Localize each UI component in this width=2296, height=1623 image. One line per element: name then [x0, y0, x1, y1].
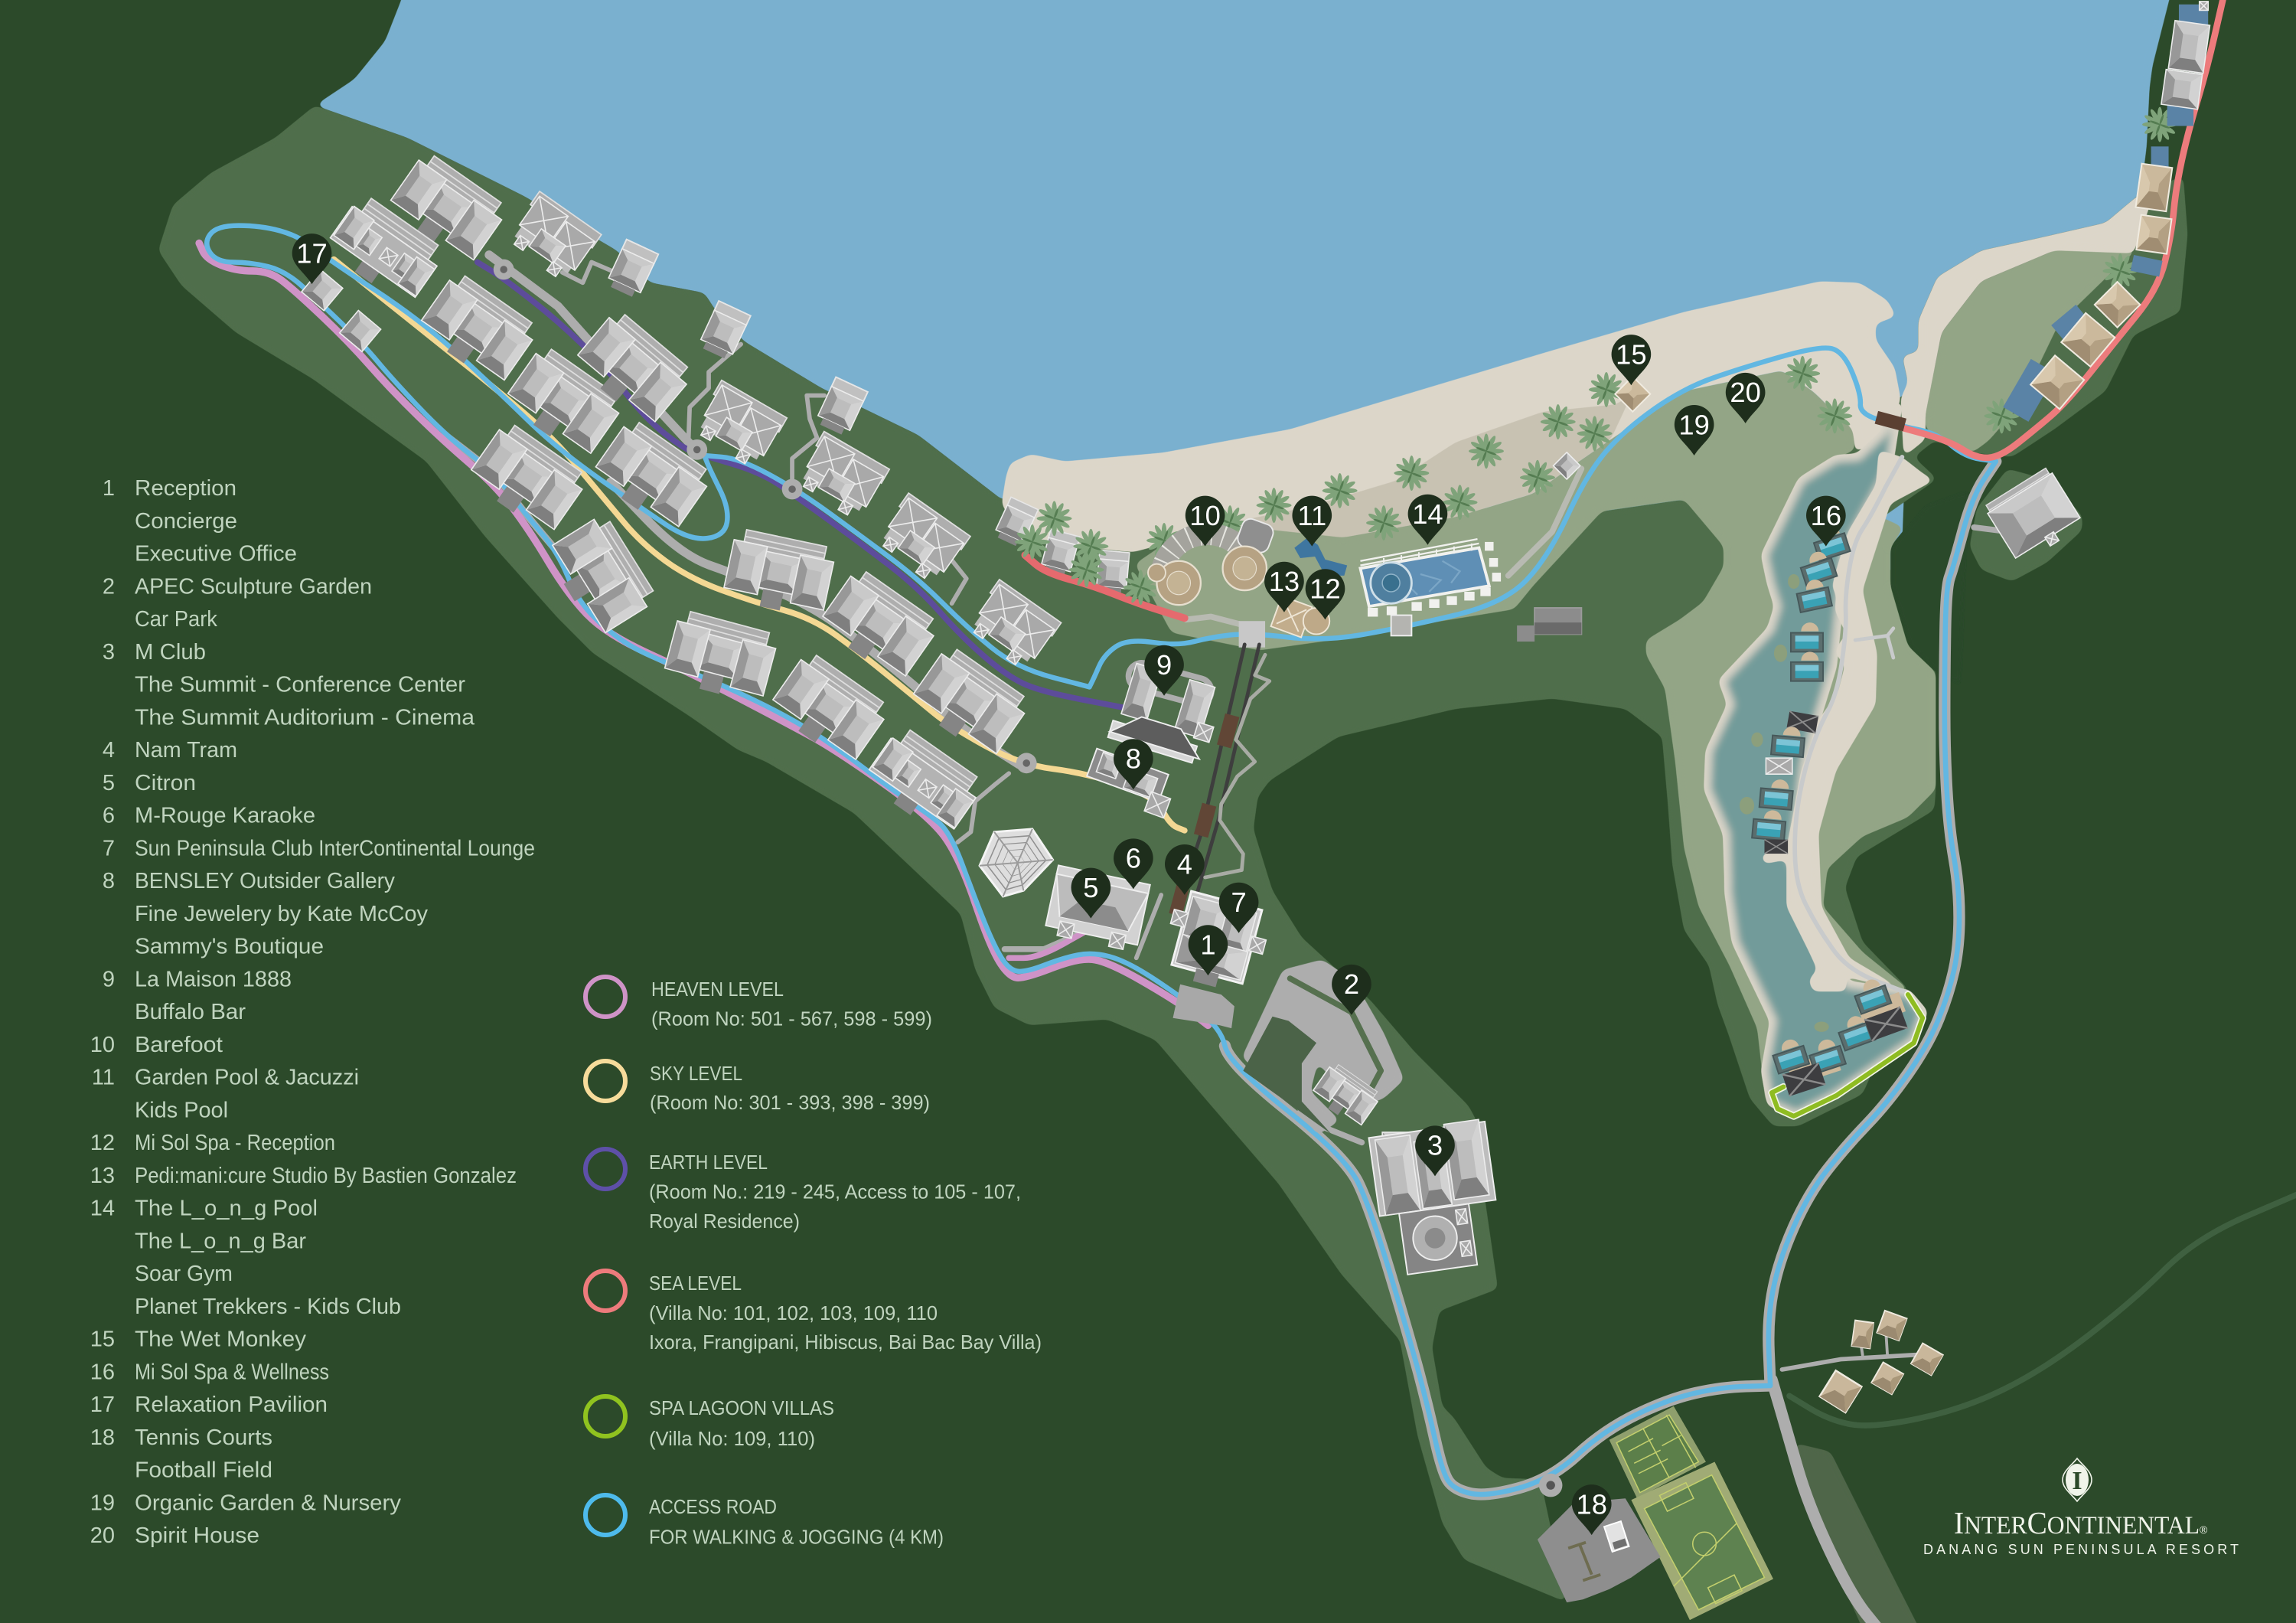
spa lagoon water — [1707, 403, 1924, 1115]
pin 7: 7 — [1231, 887, 1247, 918]
numbered facility list: 5 — [103, 771, 115, 795]
numbered facility list: Executive Office — [135, 542, 297, 567]
pin 5: 5 — [1083, 872, 1098, 903]
legend: sky level — [585, 1061, 930, 1114]
service building — [1517, 608, 1581, 642]
pin 7 — [1219, 883, 1258, 933]
pin 8 — [1114, 739, 1153, 789]
beach: east sand — [1900, 194, 2153, 457]
numbered facility list: 20 — [90, 1523, 115, 1548]
numbered facility list: Car Park — [135, 607, 217, 632]
numbered facility list: The Summit Auditorium - Cinema — [135, 705, 475, 730]
hillside villas — [302, 150, 1062, 840]
numbered facility list: Citron — [135, 771, 196, 795]
numbered facility list: Fine Jewelery by Kate McCoy — [135, 902, 428, 926]
numbered facility list: The Wet Monkey — [135, 1327, 307, 1352]
lotus pads — [1740, 574, 1829, 1032]
beach: north sand — [1002, 281, 1900, 552]
pin 2: 2 — [1344, 968, 1359, 1000]
numbered facility list: Mi Sol Spa - Reception — [135, 1131, 335, 1155]
pin 9 — [1144, 645, 1184, 696]
legend: sea level: Ixora, Frangipani, Hibiscus, Bai Bac Bay Villa) — [649, 1331, 1042, 1354]
hamlet villas — [1820, 1311, 1943, 1412]
land: eastern hillside strip — [1815, 176, 2187, 630]
wet monkey hut — [1615, 377, 1650, 412]
numbered facility list: Pedi:mani:cure Studio By Bastien Gonzalez — [135, 1164, 517, 1188]
dark forest inlet beside lagoon — [1890, 488, 1971, 688]
pin 18: 18 — [1577, 1488, 1607, 1520]
citron restaurant — [1044, 865, 1150, 952]
octagonal pavilion — [980, 829, 1053, 896]
pin 20 — [1726, 373, 1765, 423]
pin 10 — [1186, 496, 1225, 547]
pin 13: 13 — [1269, 566, 1300, 597]
numbered facility list: 12 — [90, 1131, 115, 1155]
long pool — [1360, 539, 1501, 635]
plaza and funicular rails — [1169, 621, 1270, 916]
pin 10: 10 — [1189, 500, 1221, 531]
numbered facility list: 15 — [90, 1327, 115, 1352]
pin 6 — [1114, 838, 1153, 889]
pin 11 — [1292, 496, 1332, 547]
pin 11: 11 — [1297, 500, 1326, 531]
legend: earth level: EARTH LEVEL — [649, 1151, 768, 1174]
numbered facility list: 3 — [103, 640, 115, 665]
pin 20: 20 — [1730, 377, 1761, 408]
logo registered mark: ® — [2200, 1523, 2208, 1536]
numbered facility list: Reception — [135, 476, 236, 501]
route: spa lagoon villas path — [1772, 994, 1923, 1116]
land: wedge beside lower road — [1794, 1443, 1933, 1623]
numbered facility list: The Summit - Conference Center — [135, 672, 465, 697]
numbered facility list: 4 — [103, 738, 115, 763]
numbered facility list: Tennis Courts — [135, 1425, 272, 1450]
pin 3 — [1415, 1125, 1455, 1176]
pin 1 — [1189, 925, 1228, 975]
route: sky level — [334, 260, 1185, 831]
pin 15 — [1612, 335, 1651, 385]
east shore villas — [2030, 2, 2210, 409]
numbered facility list: 7 — [103, 836, 115, 860]
numbered facility list: Football Field — [135, 1458, 272, 1482]
legend: heaven level: (Room No: 501 - 567, 598 - 599) — [651, 1007, 932, 1030]
legend: heaven level: HEAVEN LEVEL — [651, 978, 784, 1001]
garden pool — [1294, 537, 1347, 576]
numbered facility list: 2 — [103, 574, 115, 599]
la maison 1888 — [1108, 660, 1221, 765]
thin trail east of main road — [1789, 1194, 2296, 1425]
numbered facility list: 9 — [103, 967, 115, 991]
numbered facility list: Buffalo Bar — [135, 1000, 246, 1024]
pin 9: 9 — [1156, 649, 1172, 681]
numbered facility list: 6 — [103, 804, 115, 828]
pin 12 — [1306, 569, 1345, 619]
numbered facility list: Sammy's Boutique — [135, 934, 324, 958]
legend: sky level: (Room No: 301 - 393, 398 - 399) — [650, 1091, 930, 1114]
numbered facility list: Nam Tram — [135, 738, 237, 763]
beach villas — [993, 497, 1130, 595]
land: light green eastern slope — [1926, 220, 2134, 452]
beach palms — [1015, 107, 2177, 605]
lagoon footpath — [1795, 457, 1908, 993]
sports fields — [1609, 1406, 1773, 1620]
numbered facility list: 17 — [90, 1393, 115, 1417]
numbered facility list: Concierge — [135, 509, 237, 534]
route: heaven level — [199, 243, 1208, 1025]
numbered facility list: 19 — [90, 1491, 115, 1515]
route: access road — [207, 226, 1996, 1494]
pin 13 — [1264, 562, 1304, 612]
numbered facility list: BENSLEY Outsider Gallery — [135, 869, 395, 893]
pin 14: 14 — [1412, 498, 1443, 530]
numbered facility list: 8 — [103, 869, 115, 893]
numbered facility list: 14 — [90, 1196, 115, 1220]
pin 19: 19 — [1678, 409, 1710, 440]
sand spit east of lagoon — [1762, 449, 1934, 991]
bensley gallery — [1082, 749, 1178, 818]
numbered facility list: Relaxation Pavilion — [135, 1393, 328, 1417]
apec garden and car park — [1241, 959, 1404, 1135]
pin 8: 8 — [1126, 743, 1141, 775]
route: earth level — [478, 262, 1123, 707]
m club and summit — [1368, 1118, 1495, 1275]
numbered facility list: Kids Pool — [135, 1098, 228, 1122]
river bridge — [1875, 411, 1906, 431]
numbered facility list: The L_o_n_g Pool — [135, 1196, 318, 1220]
pin 16 — [1806, 496, 1846, 547]
legend: spa lagoon villas — [585, 1396, 834, 1450]
pin 16: 16 — [1811, 500, 1841, 531]
numbered facility list: Mi Sol Spa & Wellness — [135, 1360, 329, 1384]
legend: heaven level — [585, 977, 932, 1030]
numbered facility list: M Club — [135, 640, 206, 665]
route legend — [585, 977, 1042, 1548]
logo subtitle: DANANG SUN PENINSULA RESORT — [1923, 1542, 2239, 1557]
pin 19 — [1675, 405, 1714, 456]
logo emblem: I — [2072, 1467, 2082, 1495]
pin 2 — [1332, 965, 1371, 1015]
numbered facility list: Soar Gym — [135, 1262, 233, 1286]
numbered facility list — [90, 476, 535, 1548]
land: light green gardens — [1135, 371, 1936, 1106]
beach pavilion — [1554, 452, 1580, 479]
pin 17 — [292, 233, 331, 284]
legend: sea level: (Villa No: 101, 102, 103, 109, 110 — [649, 1301, 938, 1324]
numbered facility list: 18 — [90, 1425, 115, 1450]
numbered facility list: Organic Garden & Nursery — [135, 1491, 401, 1515]
villa east of road — [1984, 466, 2085, 565]
legend: sea level: SEA LEVEL — [649, 1272, 742, 1295]
barefoot restaurant — [1148, 517, 1276, 605]
legend: sky level: SKY LEVEL — [650, 1062, 742, 1085]
numbered facility list: APEC Sculpture Garden — [135, 574, 372, 599]
roads: grey service roads — [445, 255, 2009, 1623]
legend: spa lagoon villas: SPA LAGOON VILLAS — [649, 1396, 834, 1419]
legend: earth level: Royal Residence) — [649, 1210, 800, 1233]
entrance forecourt — [1173, 985, 1234, 1028]
main reception building — [1158, 888, 1274, 997]
numbered facility list: M-Rouge Karaoke — [135, 804, 315, 828]
pin 15: 15 — [1616, 338, 1647, 370]
pin 1: 1 — [1200, 929, 1216, 960]
pin 4 — [1165, 844, 1205, 895]
route: sea level beach — [1025, 555, 1185, 618]
pin 6: 6 — [1126, 843, 1141, 874]
pin 4: 4 — [1177, 848, 1192, 880]
numbered facility list: Barefoot — [135, 1033, 223, 1057]
logo emblem — [2063, 1458, 2092, 1501]
land: main peninsula — [158, 106, 1936, 1602]
pin 18 — [1572, 1484, 1612, 1535]
numbered facility list: Spirit House — [135, 1523, 259, 1548]
roundabouts — [494, 260, 1562, 1497]
numbered facility list: La Maison 1888 — [135, 967, 292, 991]
legend: access road: FOR WALKING & JOGGING (4 KM) — [649, 1525, 944, 1548]
land: villa clearing east of road — [1969, 469, 2082, 582]
numbered facility list: 10 — [90, 1033, 115, 1057]
legend: access road: ACCESS ROAD — [649, 1495, 777, 1518]
legend: earth level — [585, 1149, 1021, 1233]
pin 3: 3 — [1427, 1130, 1443, 1161]
pin 14 — [1408, 495, 1447, 545]
sea — [315, 0, 2180, 586]
numbered facility list: Sun Peninsula Club InterContinental Lounge — [135, 836, 535, 860]
lagoon villas — [1752, 523, 1908, 1096]
numbered facility list: 11 — [92, 1066, 115, 1090]
location pins — [292, 233, 1846, 1535]
intercontinental logo — [1923, 1458, 2239, 1557]
legend: sea level — [585, 1271, 1042, 1354]
pin 12: 12 — [1309, 573, 1341, 605]
pin 17: 17 — [296, 237, 328, 269]
pin 5 — [1071, 868, 1110, 919]
beach: shaded sand — [1221, 393, 1632, 537]
numbered facility list: 16 — [90, 1360, 115, 1384]
numbered facility list: 13 — [90, 1164, 115, 1188]
numbered facility list: 1 — [103, 476, 115, 501]
east villa pools — [2003, 5, 2208, 422]
logo wordmark: INTERCONTINENTAL — [1954, 1505, 2200, 1540]
numbered facility list: Garden Pool & Jacuzzi — [135, 1066, 359, 1090]
tennis centre car park — [1538, 1498, 1661, 1602]
numbered facility list: The L_o_n_g Bar — [135, 1229, 306, 1253]
numbered facility list: Planet Trekkers - Kids Club — [135, 1295, 401, 1319]
route: sea level east — [1902, 0, 2223, 458]
spa reception — [1271, 596, 1329, 637]
legend: spa lagoon villas: (Villa No: 109, 110) — [649, 1427, 815, 1450]
legend: access road — [585, 1495, 944, 1548]
legend: earth level: (Room No.: 219 - 245, Access to 105 - 107, — [649, 1181, 1021, 1203]
